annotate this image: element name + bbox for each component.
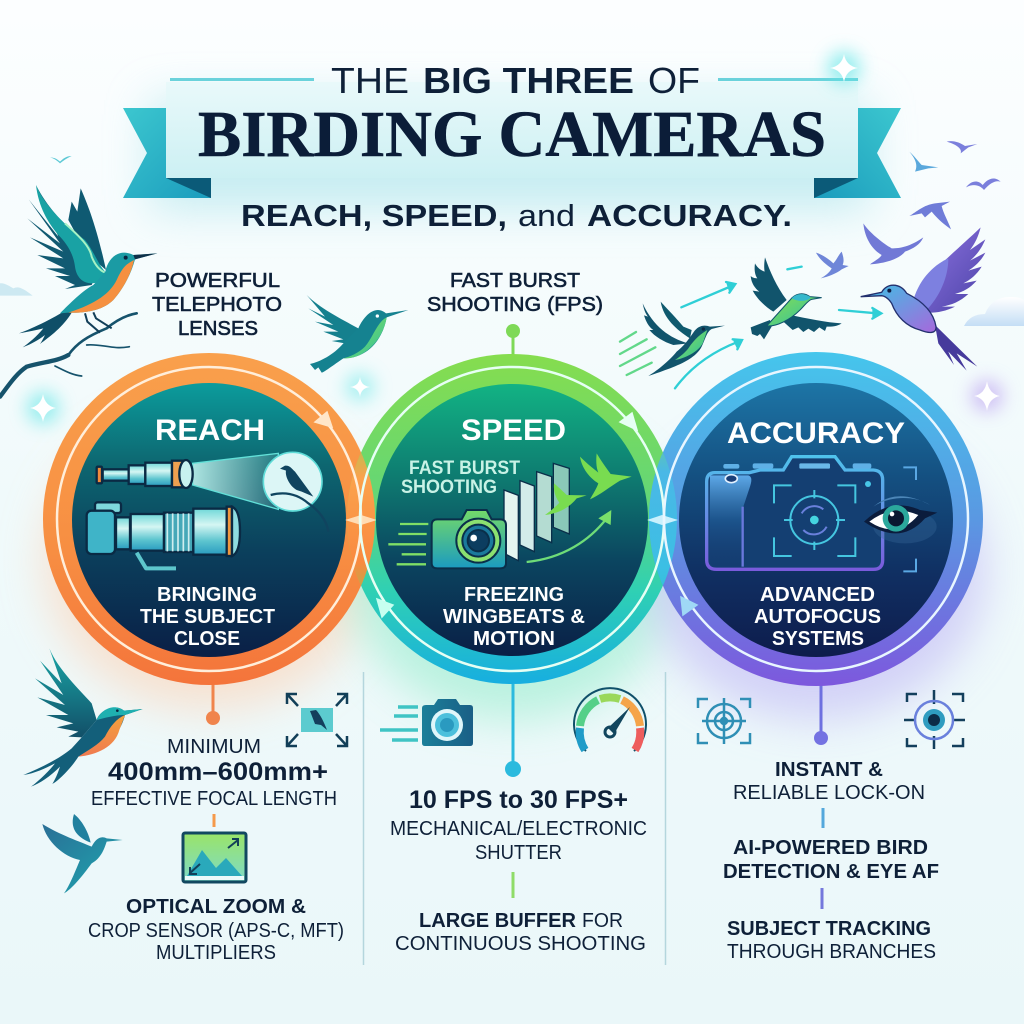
text block: subject tracking — [727, 918, 936, 963]
hummingbird left — [643, 302, 725, 376]
title line one: BIG THREE — [423, 60, 634, 101]
subtitle — [241, 198, 792, 233]
back wing — [68, 188, 106, 270]
text block: optical zoom: MULTIPLIERS — [156, 942, 276, 964]
callout: speed: SHOOTING (FPS) — [427, 294, 603, 316]
beam — [193, 453, 278, 509]
icon: camera with motion lines — [380, 699, 473, 746]
cloud left — [0, 283, 33, 296]
text block: focal length: 400mm–600mm+ — [108, 758, 328, 786]
title line two: BIRDING CAMERAS — [198, 98, 826, 171]
stem: accuracy — [814, 684, 828, 745]
bird: mid hummingbird — [307, 295, 408, 373]
sparkle: right — [971, 380, 1003, 412]
title line one — [331, 60, 700, 101]
caption: reach — [140, 584, 275, 650]
text block: buffer: LARGE BUFFER — [419, 910, 577, 932]
heading: reach: REACH — [155, 414, 265, 447]
wing fan — [27, 185, 97, 289]
label: fast burst shooting: SHOOTING — [401, 477, 497, 498]
tiny bird — [50, 156, 72, 163]
outer brackets — [903, 467, 916, 571]
text block: focal length: MINIMUM — [167, 736, 261, 758]
tick: speed — [512, 872, 514, 898]
icon: expand bird — [287, 694, 347, 746]
ring: speed — [347, 354, 677, 684]
callout: reach: LENSES — [178, 318, 258, 340]
caption: accuracy: AUTOFOCUS — [754, 606, 881, 628]
icon: target — [698, 698, 750, 744]
ribbon tail left — [123, 108, 211, 198]
speed lines — [620, 332, 655, 375]
hummingbird centre — [751, 257, 842, 339]
callout: reach: TELEPHOTO — [152, 294, 282, 316]
text block: lock-on: RELIABLE LOCK-ON — [733, 782, 925, 804]
caption: speed: WINGBEATS & — [443, 606, 585, 628]
icon: crop picture — [183, 833, 246, 882]
ribbon tail right — [814, 108, 901, 198]
icon: burst camera and frames — [388, 453, 632, 568]
text block: AI detection — [723, 837, 939, 883]
cloud right — [964, 297, 1024, 326]
eye — [864, 496, 937, 543]
label: fast burst shooting: FAST BURST — [409, 458, 520, 479]
camera body — [707, 457, 883, 569]
stem: speed — [505, 684, 521, 777]
icon: speedometer — [574, 688, 646, 751]
text block: optical zoom — [88, 896, 344, 964]
flock bird — [947, 141, 977, 153]
tick: accuracy two — [820, 888, 824, 909]
hummingbird purple — [861, 227, 985, 371]
tick: reach — [212, 814, 216, 827]
flock bird — [966, 178, 1001, 190]
callout: reach — [152, 270, 282, 340]
ring: reach — [43, 353, 375, 685]
subtitle: REACH, SPEED, — [241, 198, 507, 233]
text block: buffer: FOR — [582, 910, 623, 932]
panel: reach — [57, 367, 377, 671]
focus reticle — [774, 485, 855, 556]
hummingbird with orange belly — [23, 648, 143, 787]
subtitle: ACCURACY. — [587, 198, 792, 233]
flock bird — [909, 152, 938, 172]
caption: accuracy: ADVANCED — [760, 584, 875, 606]
wing covert — [36, 185, 105, 283]
caption: reach: THE SUBJECT — [140, 606, 275, 628]
legs — [85, 312, 112, 333]
caption: speed — [443, 584, 585, 650]
text block: AI detection: AI-POWERED BIRD — [733, 837, 928, 859]
bird small — [545, 483, 587, 515]
panel: speed — [360, 367, 678, 671]
sparkle: left — [27, 392, 59, 424]
caption: speed: MOTION — [473, 628, 555, 650]
tick: accuracy one — [822, 808, 824, 828]
title line one: THE — [331, 60, 409, 101]
tail — [19, 307, 72, 347]
text block: subject tracking: SUBJECT TRACKING — [727, 918, 931, 940]
flock bird — [863, 223, 923, 264]
icon: eye target — [904, 690, 965, 749]
text block: buffer: CONTINUOUS SHOOTING — [395, 933, 646, 955]
belly — [68, 260, 134, 313]
sparkle: centre — [346, 373, 374, 401]
caption: accuracy: SYSTEMS — [772, 628, 864, 650]
text block: frame rate — [390, 786, 647, 864]
sparkle: title — [828, 52, 860, 84]
label: fast burst shooting — [401, 458, 520, 498]
flock bird — [909, 202, 951, 229]
callout: speed — [427, 270, 603, 316]
dividers — [364, 672, 666, 965]
motion arrows — [675, 267, 881, 388]
text block: focal length: EFFECTIVE FOCAL LENGTH — [91, 788, 337, 810]
text block: frame rate: SHUTTER — [475, 842, 562, 864]
text block: optical zoom: OPTICAL ZOOM & — [126, 896, 306, 918]
text block: focal length — [91, 736, 337, 810]
text block: AI detection: DETECTION & EYE AF — [723, 861, 939, 883]
text block: subject tracking: THROUGH BRANCHES — [727, 941, 936, 963]
bird large — [580, 453, 632, 499]
stem: reach — [206, 684, 220, 725]
flock bird — [816, 252, 849, 278]
icon: telescope and telephoto camera — [87, 452, 328, 568]
scene: lower-left birds — [23, 648, 143, 893]
text block: optical zoom: CROP SENSOR (APS-C, MFT) — [88, 920, 344, 942]
text block: frame rate: 10 FPS to 30 FPS+ — [409, 786, 628, 814]
connector: speed callout — [506, 324, 520, 356]
callout: speed: FAST BURST — [450, 270, 580, 292]
title banner — [123, 60, 901, 198]
text block: buffer — [395, 910, 646, 955]
speed lines — [388, 524, 428, 564]
grip — [709, 475, 751, 567]
callout: reach: POWERFUL — [155, 270, 280, 292]
heading: speed: SPEED — [461, 414, 566, 447]
icon: autofocus camera with eye — [707, 457, 937, 571]
telescope — [97, 460, 193, 488]
caption: speed: FREEZING — [464, 584, 564, 606]
text block: frame rate: MECHANICAL/ELECTRONIC — [390, 818, 647, 840]
caption: accuracy — [754, 584, 881, 650]
title line one: OF — [648, 60, 700, 101]
ring: accuracy — [649, 352, 983, 686]
branch — [0, 313, 137, 397]
text block: lock-on: INSTANT & — [775, 759, 883, 781]
body — [60, 253, 157, 313]
caption: reach: CLOSE — [174, 628, 240, 650]
text block: lock-on — [733, 759, 925, 804]
caption: reach: BRINGING — [157, 584, 257, 606]
birds and arrows top right — [620, 141, 1001, 388]
target bird circle — [263, 452, 328, 532]
telephoto camera — [87, 502, 240, 556]
camera — [432, 510, 506, 568]
burst frames — [504, 463, 569, 561]
panel: accuracy — [664, 367, 968, 671]
hummingbird silhouette — [42, 814, 123, 893]
curved arrow — [527, 518, 607, 562]
scene: perched bird on branch — [0, 156, 157, 397]
heading: accuracy: ACCURACY — [727, 417, 905, 450]
subtitle: and — [518, 198, 575, 233]
